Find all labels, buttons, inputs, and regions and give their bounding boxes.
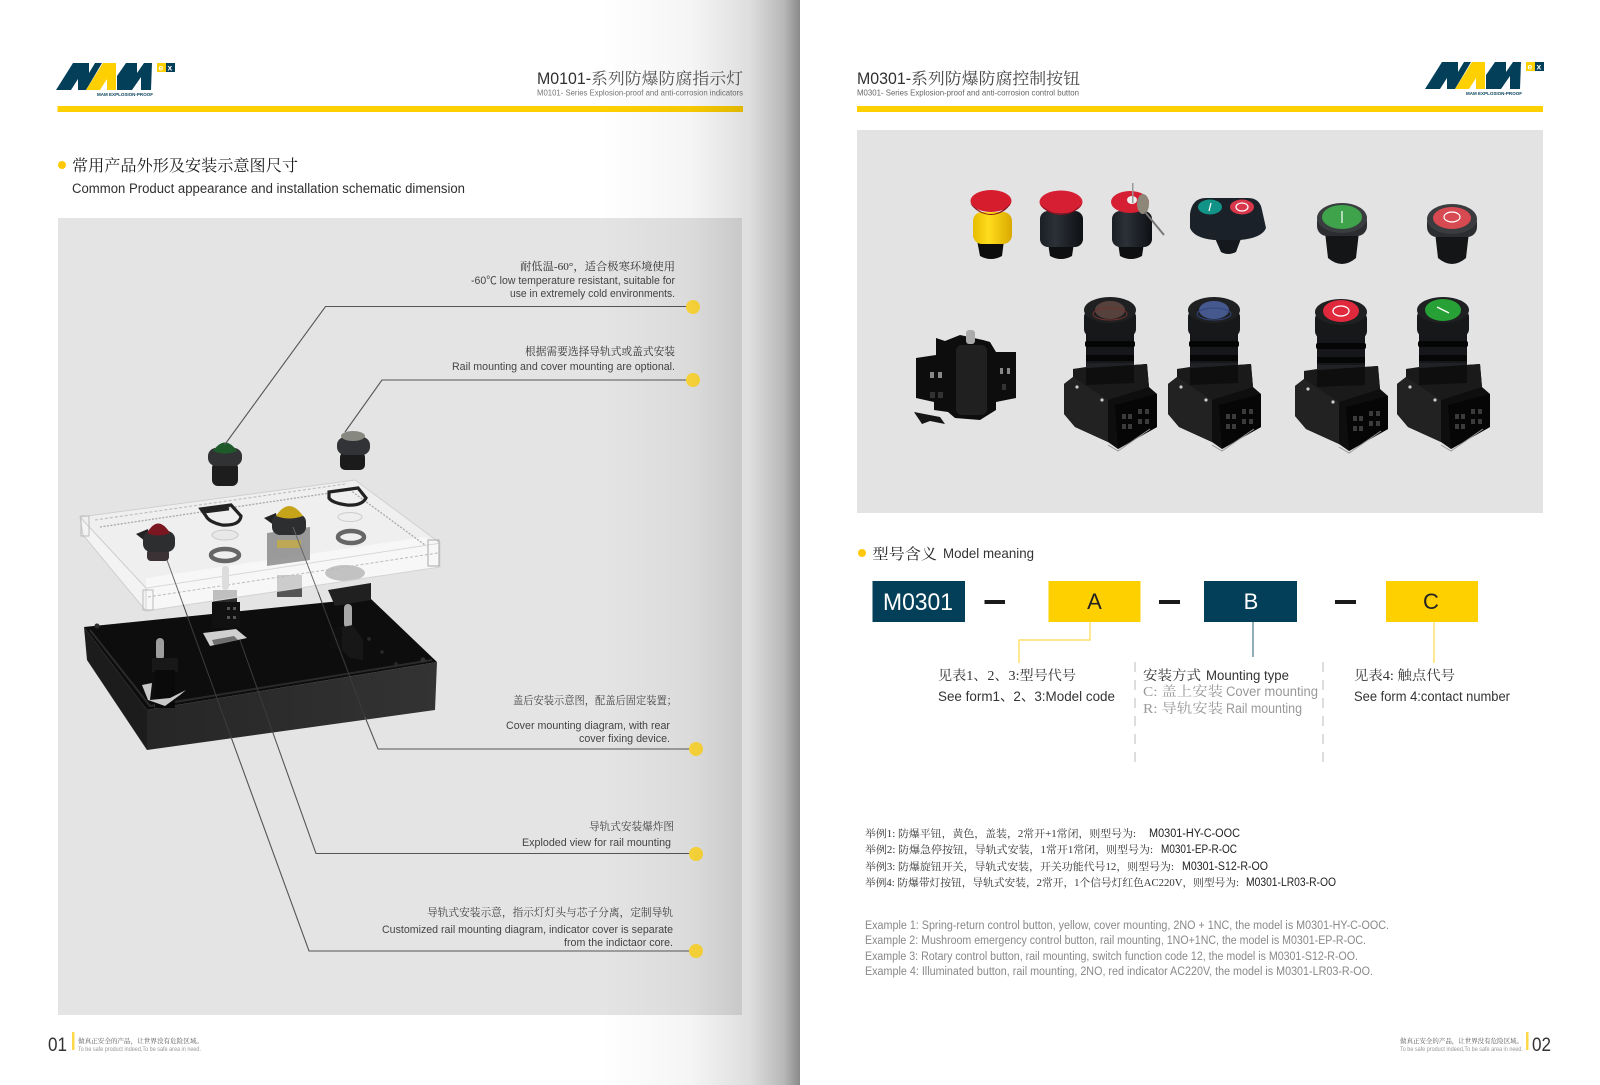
product: yellow mushroom button xyxy=(970,190,1012,259)
dash 2 xyxy=(1159,600,1180,604)
product: double button xyxy=(1190,198,1266,254)
examples in Chinese: 举例4: 防爆带灯按钮，导轨式安装，2常开，1个信号灯红色AC220V，则型号为: xyxy=(865,876,1239,889)
box: A xyxy=(1048,581,1140,622)
logo: MAM explosion-proof (right): e xyxy=(1528,62,1532,72)
footer right: To be safe product indeed,To be safe area in need. xyxy=(1400,1047,1523,1053)
section heading: model meaning: Model meaning xyxy=(943,545,1034,561)
note: mounting type xyxy=(1143,667,1318,716)
section heading: appearance and installation: Common Product appearance and installation schematic dimension xyxy=(72,181,465,196)
logo: MAM explosion-proof (left) xyxy=(56,62,175,97)
callout: rail and cover mounting: 根据需要选择导轨式或盖式安装 xyxy=(525,344,675,358)
header title left: M0101- Series Explosion-proof and anti-corrosion indicators xyxy=(537,88,743,98)
examples in English: Example 2: Mushroom emergency control button, rail mounting, 1NO+1NC, the model is M0301-EP-R-OC. xyxy=(865,935,1366,947)
logo: MAM explosion-proof (right) xyxy=(1425,62,1544,96)
callout: rail and cover mounting: Rail mounting and cover mounting are optional. xyxy=(452,361,675,373)
product: red flush button xyxy=(1427,204,1477,264)
section heading: model meaning: 型号含义 xyxy=(872,545,937,563)
footer left: 做真正安全的产品，让世界没有危险区域。 xyxy=(78,1036,203,1045)
lamp: dark core xyxy=(337,431,370,470)
examples in Chinese: M0301-LR03-R-OO xyxy=(1246,877,1336,889)
callout: rail and cover mounting xyxy=(345,344,700,432)
section heading: model meaning xyxy=(858,545,1034,563)
callout: customized rail mounting xyxy=(167,560,703,958)
diagram: exploded enclosure xyxy=(80,431,440,750)
box: B: B xyxy=(1244,589,1258,614)
right page header xyxy=(857,62,1544,112)
model code diagram xyxy=(872,581,1510,763)
examples in Chinese: M0301-EP-R-OC xyxy=(1161,844,1237,856)
logo: MAM explosion-proof (left): x xyxy=(168,62,172,72)
callout: exploded view for rail mounting xyxy=(240,640,703,861)
callout: low temperature: use in extremely cold environments. xyxy=(510,288,675,300)
note: mounting type: Mounting type xyxy=(1206,668,1289,683)
lamp: yellow indicator xyxy=(264,506,306,535)
logo: MAM explosion-proof (right): MAM EXPLOSION-PROOF xyxy=(1466,91,1522,96)
header title right: M0301- xyxy=(857,69,911,88)
transparent cover xyxy=(80,480,440,611)
footer right: 做真正安全的产品，让世界没有危险区域。 xyxy=(1400,1036,1523,1045)
connector A xyxy=(1019,622,1090,663)
black enclosure box xyxy=(84,598,437,750)
callout: exploded view for rail mounting: 导轨式安装爆炸图 xyxy=(589,819,674,833)
footer right: 02 xyxy=(1532,1035,1551,1056)
logo: MAM explosion-proof (left): MAM EXPLOSION-PROOF xyxy=(97,92,153,97)
note: mounting type: Cover mounting xyxy=(1226,684,1318,699)
callout: low temperature: -60℃ low temperature resistant, suitable for xyxy=(471,275,675,287)
box: M0301 xyxy=(872,581,965,622)
header title left: 系列防爆防腐指示灯 xyxy=(591,70,743,88)
note: model code: 见表1、2、3:型号代号 xyxy=(938,667,1076,683)
header rule left xyxy=(58,106,743,112)
products bottom row xyxy=(914,297,1490,453)
product: red mushroom button xyxy=(1040,190,1083,259)
panel: exploded view xyxy=(58,218,742,1015)
examples in Chinese: 举例1: 防爆平钮，黄色，盖装，2常开+1常闭，则型号为: xyxy=(865,827,1136,840)
callout: customized rail mounting: Customized rail mounting diagram, indicator cover is separate xyxy=(382,924,673,936)
header rule right xyxy=(857,106,1543,112)
note: mounting type: R: 导轨安装 xyxy=(1143,700,1224,716)
box: M0301: M0301 xyxy=(883,589,953,616)
product: illuminated button blue xyxy=(1168,297,1261,451)
plates and rings on cover xyxy=(201,488,366,590)
logo: MAM explosion-proof (right): x xyxy=(1536,62,1542,72)
product: contact module xyxy=(914,330,1016,424)
footer left: 01 xyxy=(48,1035,67,1056)
footer left xyxy=(48,1032,203,1056)
note: contact number xyxy=(1354,667,1510,704)
product: key switch xyxy=(1111,183,1164,259)
examples in Chinese xyxy=(865,827,1336,889)
left page header xyxy=(56,62,743,112)
footer right xyxy=(1400,1032,1551,1056)
products top row xyxy=(970,183,1477,264)
header title right: M0301- Series Explosion-proof and anti-corrosion control button xyxy=(857,88,1079,98)
header title right xyxy=(857,69,1080,98)
lamp: red indicator xyxy=(136,524,175,561)
callout: customized rail mounting: 导轨式安装示意，指示灯灯头与芯子分离，定制导轨 xyxy=(427,905,673,919)
lamp: green indicator xyxy=(208,442,242,486)
note: model code: See form1、2、3:Model code xyxy=(938,689,1115,704)
note: contact number: See form 4:contact number xyxy=(1354,689,1510,704)
internal components xyxy=(142,565,371,708)
callout: cover mounting diagram: 盖后安装示意图，配盖后固定装置； xyxy=(513,693,677,707)
leader lines and callouts xyxy=(167,259,703,958)
panel: product photos xyxy=(857,130,1543,513)
callout: exploded view for rail mounting: Exploded view for rail mounting xyxy=(522,837,671,849)
dash 3 xyxy=(1335,600,1356,604)
dashed divider left xyxy=(1134,662,1136,763)
callout: cover mounting diagram xyxy=(293,527,703,756)
product: green push button xyxy=(1397,297,1490,451)
dashed divider right xyxy=(1322,662,1324,763)
section heading: appearance and installation: 常用产品外形及安装示意图尺寸 xyxy=(72,157,298,175)
examples in Chinese: M0301-S12-R-OO xyxy=(1182,861,1268,873)
note: mounting type: 安装方式 xyxy=(1143,667,1201,683)
box: C: C xyxy=(1423,589,1439,614)
examples in Chinese: 举例3: 防爆旋钮开关，导轨式安装，开关功能代号12，则型号为: xyxy=(865,860,1174,873)
footer left: To be safe product indeed,To be safe area in need. xyxy=(78,1047,201,1053)
header title left xyxy=(537,69,743,98)
product: red push button xyxy=(1295,299,1388,453)
box: A: A xyxy=(1087,589,1102,614)
callout: cover mounting diagram: cover fixing device. xyxy=(579,733,670,745)
callout: customized rail mounting: from the indictaor core. xyxy=(564,937,673,949)
examples in English: Example 1: Spring-return control button, yellow, cover mounting, 2NO + 1NC, the model is M0301-HY-C-OOC. xyxy=(865,920,1389,932)
dash 1 xyxy=(984,600,1005,604)
examples in English: Example 3: Rotary control button, rail mounting, switch function code 12, the model is M0301-S12-R-OO. xyxy=(865,951,1358,963)
note: mounting type: Rail mounting xyxy=(1226,701,1302,716)
box: B xyxy=(1204,581,1297,622)
section heading: appearance and installation xyxy=(58,157,465,196)
callout: low temperature: 耐低温-60°，适合极寒环境使用 xyxy=(520,259,675,273)
note: mounting type: C: 盖上安装 xyxy=(1143,683,1224,699)
product: illuminated button brown xyxy=(1064,297,1157,451)
examples in Chinese: M0301-HY-C-OOC xyxy=(1149,828,1240,840)
examples in Chinese: 举例2: 防爆急停按钮，导轨式安装，1常开1常闭，则型号为: xyxy=(865,843,1153,856)
header title left: M0101- xyxy=(537,69,591,88)
callout: low temperature xyxy=(224,259,700,445)
header title right: 系列防爆防腐控制按钮 xyxy=(911,70,1080,88)
box: C xyxy=(1386,581,1478,622)
note: model code xyxy=(938,667,1115,704)
callout: cover mounting diagram: Cover mounting diagram, with rear xyxy=(506,720,670,732)
examples in English xyxy=(865,920,1389,978)
note: contact number: 见表4: 触点代号 xyxy=(1354,667,1455,683)
logo: MAM explosion-proof (left): e xyxy=(158,62,164,72)
book gutter shadow xyxy=(600,0,800,1085)
product: green flush button xyxy=(1317,203,1367,264)
connector B xyxy=(1252,622,1254,657)
examples in English: Example 4: Illuminated button, rail mounting, 2NO, red indicator AC220V, the model is M0301-LR03-R-OO. xyxy=(865,966,1373,978)
connector C xyxy=(1433,622,1435,663)
